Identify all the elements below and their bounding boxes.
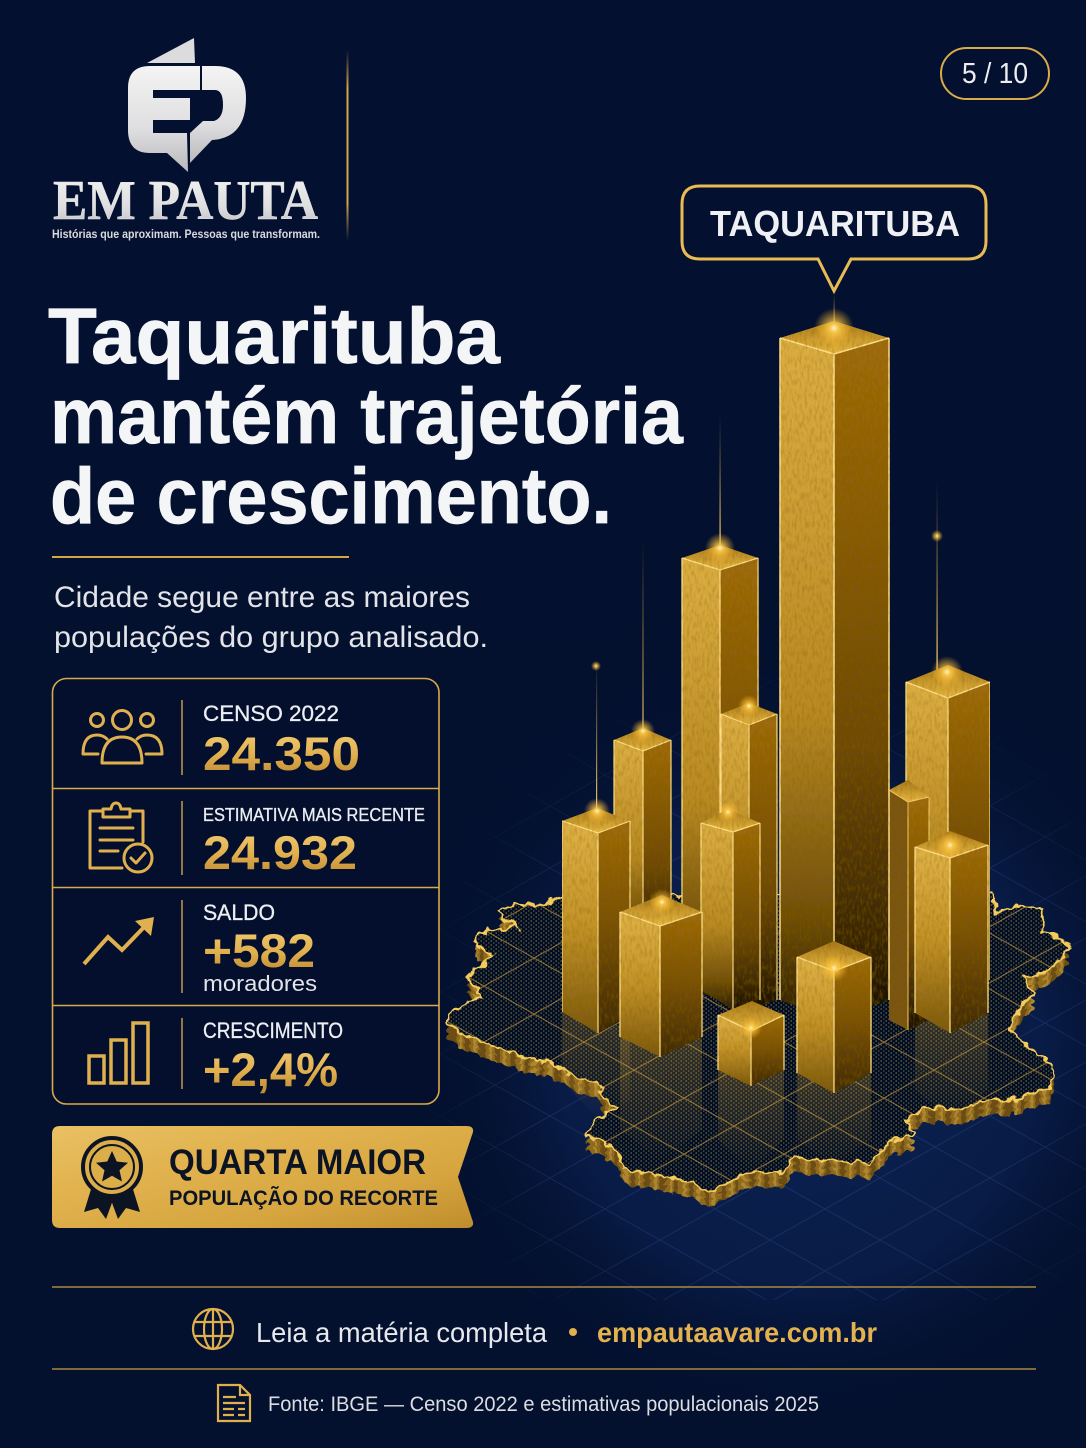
stat: Crescimento xyxy=(89,1018,343,1096)
stat: Saldo: +582 xyxy=(203,924,315,977)
icon: rising arrow xyxy=(84,917,154,964)
page indicator pill xyxy=(941,48,1049,99)
subtitle xyxy=(54,581,488,654)
logo mark: EP speech bubble xyxy=(128,38,246,172)
page indicator pill: 5 / 10 xyxy=(962,58,1028,90)
footer link row: Leia a matéria completa xyxy=(256,1317,547,1348)
ribbon badge: POPULAÇÃO DO RECORTE xyxy=(169,1187,438,1210)
stat: Crescimento: CRESCIMENTO xyxy=(203,1018,343,1043)
light rays xyxy=(591,293,943,810)
icon: clipboard with check xyxy=(90,803,152,872)
stat: Estimativa mais recente xyxy=(90,803,425,879)
background xyxy=(432,676,1086,1348)
source row xyxy=(218,1385,819,1421)
stat: Censo 2022: CENSO 2022 xyxy=(203,701,339,726)
title: Taquarituba xyxy=(48,291,501,380)
subtitle: Cidade segue entre as maiores xyxy=(54,581,470,614)
bar: centre back xyxy=(721,703,777,1010)
logo divider line xyxy=(346,50,348,241)
source row: Fonte: IBGE — Censo 2022 e estimativas populacionais 2025 xyxy=(268,1393,819,1416)
icon: medal with star xyxy=(83,1138,141,1219)
title: mantém trajetória xyxy=(50,371,684,460)
bar: left front xyxy=(562,808,630,1033)
gold 3D bar chart xyxy=(562,293,990,1093)
bar: left back xyxy=(614,728,671,950)
map top surface xyxy=(440,880,1080,1200)
bar: right front xyxy=(915,831,988,1033)
ribbon badge xyxy=(52,1126,473,1228)
bar top sparkles xyxy=(584,308,964,1039)
bar: second tallest xyxy=(682,545,758,1000)
icon: bar chart xyxy=(89,1023,148,1083)
bar: behind tallest right xyxy=(889,780,929,1030)
stat: Censo 2022 xyxy=(83,701,360,780)
stat: Estimativa mais recente: ESTIMATIVA MAIS RECENTE xyxy=(203,805,425,825)
bar: mid left front xyxy=(620,895,702,1057)
footer link row xyxy=(52,1287,1036,1369)
logo wordmark: EM PAUTA xyxy=(53,170,319,232)
icon: document xyxy=(218,1385,250,1421)
stat: Censo 2022: 24.350 xyxy=(203,727,360,780)
stat: Saldo xyxy=(84,900,317,996)
bar: centre front xyxy=(797,941,871,1093)
callout: Taquarituba xyxy=(682,186,986,291)
icon: people xyxy=(83,710,162,763)
stat: Saldo: moradores xyxy=(203,971,317,996)
isometric map platform xyxy=(440,880,1080,1208)
stat: Saldo: SALDO xyxy=(203,900,275,925)
ribbon badge: QUARTA MAIOR xyxy=(169,1143,426,1182)
title underline xyxy=(52,556,349,558)
callout: Taquarituba: TAQUARITUBA xyxy=(710,203,960,244)
logo: Em Pauta xyxy=(52,38,320,241)
panel: statistics xyxy=(52,678,439,1104)
bar reflections on map xyxy=(562,1000,988,1170)
subtitle: populações do grupo analisado. xyxy=(54,621,488,654)
map extruded side xyxy=(449,901,1070,1208)
icon: globe xyxy=(193,1309,233,1349)
footer link row: empautaavare.com.br xyxy=(597,1317,877,1348)
bar: tallest, Taquarituba xyxy=(780,321,889,1020)
stat: Estimativa mais recente: 24.932 xyxy=(203,826,357,879)
stat: Crescimento: +2,4% xyxy=(203,1043,338,1096)
bar: smallest xyxy=(718,1001,784,1086)
title: de crescimento. xyxy=(50,451,612,540)
logo tagline: Histórias que aproximam. Pessoas que transformam. xyxy=(52,229,320,241)
bar: right back xyxy=(906,665,990,1000)
bar: centre mid xyxy=(701,809,760,1010)
title xyxy=(48,291,684,540)
